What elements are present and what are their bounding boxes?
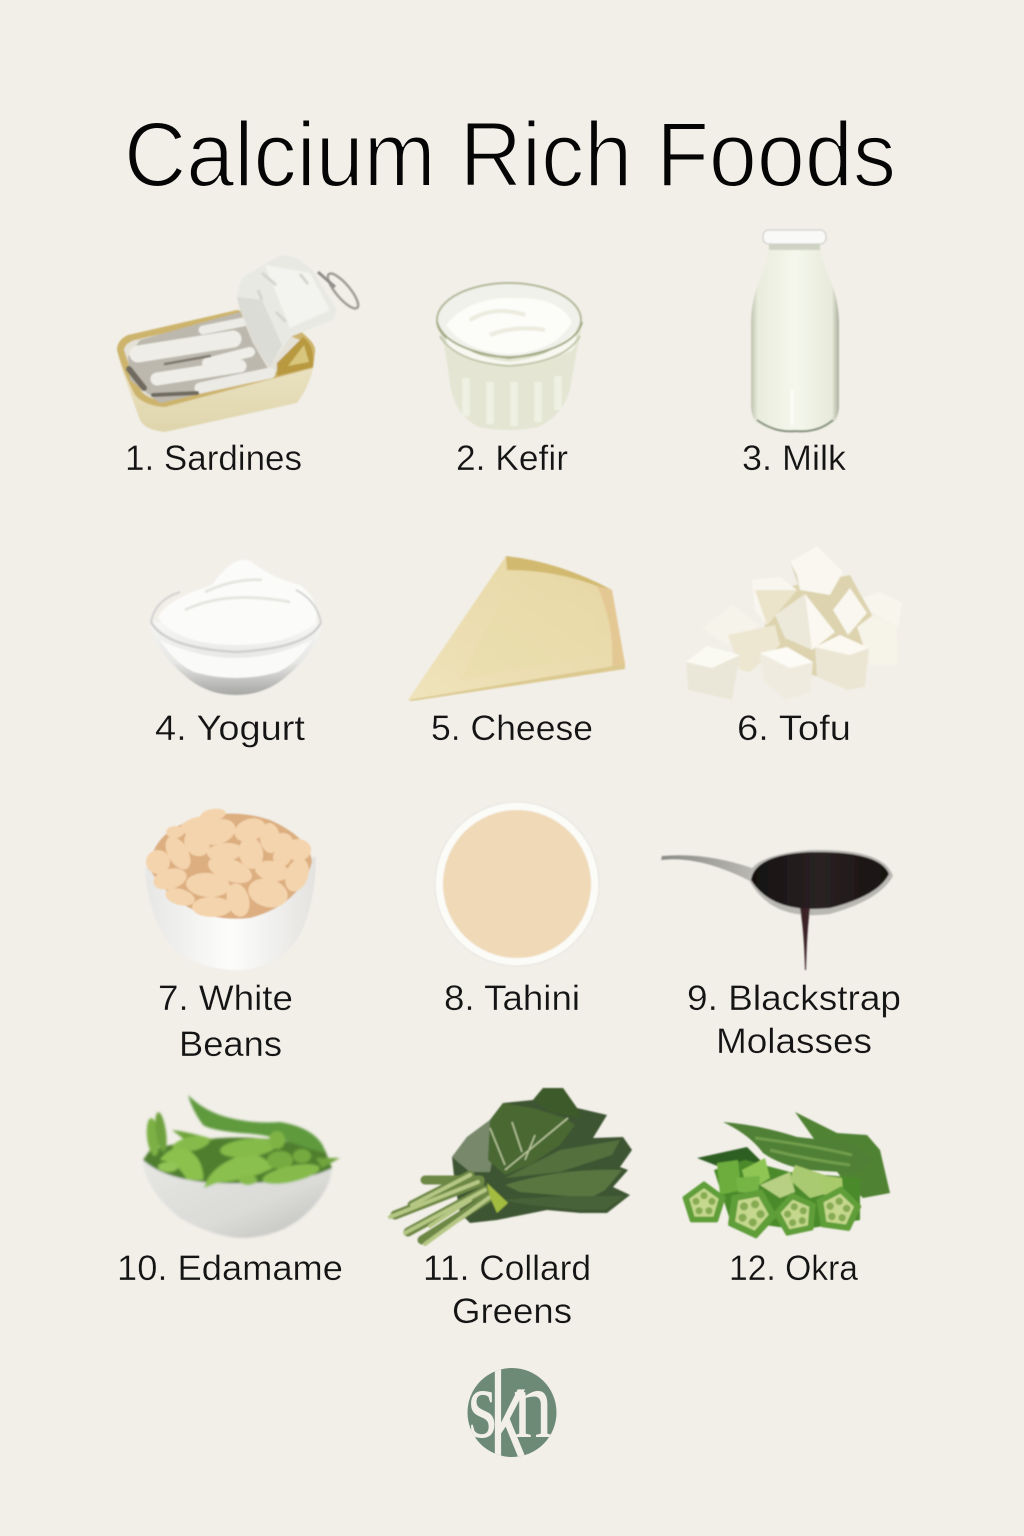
label: sardines: 1. Sardines bbox=[125, 439, 302, 478]
label: edamame: 10. Edamame bbox=[117, 1249, 343, 1288]
item 1: sardines bbox=[117, 255, 363, 478]
item 7: white beans bbox=[145, 807, 316, 1064]
label: tofu: 6. Tofu bbox=[737, 709, 851, 748]
logo: n bbox=[513, 1351, 553, 1459]
item 3: milk bbox=[742, 230, 847, 478]
icon: sardine tin bbox=[117, 255, 363, 432]
logo: k bbox=[490, 1342, 526, 1487]
item 12: okra bbox=[684, 1112, 890, 1288]
icon: bowl of edamame bbox=[143, 1095, 340, 1238]
logo: s bbox=[468, 1351, 497, 1459]
label: blackstrap molasses: 9. Blackstrap bbox=[687, 979, 901, 1018]
item 4: yogurt bbox=[150, 560, 322, 748]
item 6: tofu bbox=[686, 546, 902, 748]
item 10: edamame bbox=[117, 1095, 343, 1288]
icon: okra pods and slices bbox=[684, 1112, 890, 1240]
label: okra: 12. Okra bbox=[729, 1249, 859, 1288]
item 5: cheese bbox=[408, 556, 625, 748]
label: collard greens: 11. Collard bbox=[423, 1249, 591, 1288]
label: cheese: 5. Cheese bbox=[431, 709, 593, 748]
icon: tofu cubes bbox=[686, 546, 902, 700]
item 11: collard greens bbox=[390, 1088, 632, 1331]
icon: bunch of collard greens bbox=[390, 1088, 632, 1244]
icon: milk bottle bbox=[751, 230, 839, 431]
label: white beans: Beans bbox=[179, 1025, 282, 1064]
icon: kefir glass bbox=[437, 283, 582, 430]
item 9: blackstrap molasses bbox=[661, 850, 901, 1061]
logo bbox=[468, 1368, 556, 1457]
title: Calcium Rich Foods bbox=[124, 104, 896, 206]
label: blackstrap molasses: Molasses bbox=[716, 1022, 872, 1061]
icon: parmesan wedge bbox=[408, 556, 625, 701]
label: white beans: 7. White bbox=[158, 979, 293, 1018]
label: kefir: 2. Kefir bbox=[456, 439, 568, 478]
label: tahini: 8. Tahini bbox=[444, 979, 580, 1018]
icon: dish of tahini bbox=[435, 802, 599, 966]
label: yogurt: 4. Yogurt bbox=[155, 709, 305, 748]
item 2: kefir bbox=[437, 283, 582, 478]
icon: spoon with molasses bbox=[661, 850, 893, 970]
label: collard greens: Greens bbox=[452, 1292, 572, 1331]
label: milk: 3. Milk bbox=[742, 439, 847, 478]
item 8: tahini bbox=[435, 802, 599, 1018]
icon: bowl of white beans bbox=[145, 807, 316, 970]
icon: yogurt bowl bbox=[150, 560, 322, 695]
